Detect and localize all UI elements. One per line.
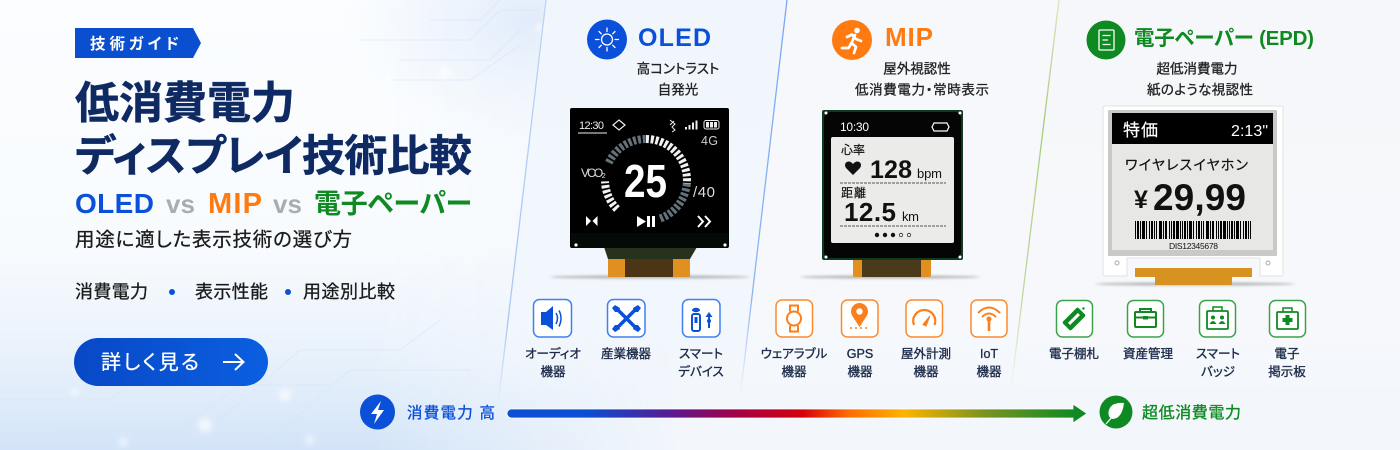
readouts: 距離 [841, 186, 866, 200]
gauge ring [605, 139, 687, 219]
description: MIP: 低消費電力・常時表示 [855, 82, 989, 98]
device: OLED display [550, 108, 750, 278]
label: e-signage [1268, 347, 1306, 379]
readouts: km [902, 209, 919, 224]
icon tile: wearable [776, 300, 812, 337]
media controls [586, 216, 710, 227]
icon tile: IoT [971, 300, 1007, 337]
status bar [840, 120, 949, 134]
description: EPD: 紙のような視認性 [1147, 82, 1253, 98]
description: EPD [1147, 62, 1253, 98]
label: e-signage: 掲示板 [1268, 364, 1306, 379]
device: OLED display: /40 [693, 184, 715, 201]
readouts: bpm [917, 166, 942, 181]
device: EPD display [1095, 106, 1295, 286]
label: wearable: ウェアラブル [761, 346, 827, 361]
price tag content: DIS12345678 [1169, 241, 1218, 251]
comparison heading: MIP [208, 188, 262, 220]
label: wearable: 機器 [781, 365, 807, 379]
gauge value: 25 [624, 155, 667, 207]
icon: EPD document [1086, 20, 1126, 60]
label: e-signage: 電子 [1274, 347, 1300, 361]
icon: MIP runner [832, 20, 872, 60]
comparison heading: vs [166, 189, 195, 219]
label: audio: 機器 [540, 365, 566, 379]
heading: OLED: OLED [638, 24, 711, 52]
label: GPS [847, 347, 873, 379]
icon tile: GPS [842, 300, 878, 337]
icon tile: smart badge [1200, 300, 1236, 337]
icon tile: e-signage [1270, 300, 1306, 337]
label: IoT: IoT [980, 347, 998, 361]
panel: MIP [761, 20, 1007, 379]
label: outdoor measurement: 屋外計測 [901, 346, 951, 361]
icon tile: e-shelf label [1056, 300, 1092, 337]
label: outdoor measurement [901, 346, 951, 379]
label: high power: 消費電力 高 [407, 404, 495, 422]
status bar: 12:30 [579, 120, 604, 132]
price tag header [1123, 121, 1268, 140]
label: industrial: 産業機器 [601, 346, 651, 361]
arrow: power gradient [507, 404, 1087, 423]
badge: guide tag [75, 28, 201, 58]
comparison heading: vs [273, 189, 302, 219]
readouts: 128 [870, 156, 912, 184]
label: e-shelf label: 電子棚札 [1049, 346, 1099, 361]
label: smart badge: バッジ [1201, 365, 1235, 379]
description: MIP: 屋外視認性 [883, 62, 951, 76]
price tag header: 特価 [1123, 121, 1158, 140]
comparison heading: OLED [75, 188, 154, 219]
comparison heading: 電子ペーパー [314, 189, 472, 219]
label: GPS: 機器 [847, 365, 873, 379]
label: smart badge [1196, 347, 1240, 379]
label: IoT [976, 347, 1002, 379]
device: MIP display [800, 110, 980, 278]
button: details: 詳しく見る [101, 351, 199, 374]
label: audio [525, 346, 581, 379]
device: OLED display: VCO₂ [581, 166, 606, 180]
price tag header: 2:13" [1231, 123, 1268, 140]
label: IoT: 機器 [976, 365, 1002, 379]
title [75, 79, 472, 181]
power scale [360, 394, 1241, 430]
comparison heading [75, 188, 472, 220]
heading: MIP: MIP [885, 22, 933, 52]
label: smart device: スマート [679, 347, 723, 361]
background [0, 0, 1060, 450]
subtitle: 用途に適した表示技術の選び方 [75, 229, 352, 251]
feature list: 用途別比較 [303, 282, 395, 302]
icon tile: industrial [608, 300, 645, 337]
feature list [75, 282, 395, 302]
status bar: 4G [701, 134, 718, 148]
description: OLED: 自発光 [658, 82, 698, 98]
status bar: 10:30 [840, 120, 869, 134]
readouts: 12.5 [844, 197, 896, 227]
label: wearable [761, 346, 827, 379]
panel: EPD [1049, 20, 1314, 379]
price tag content: ワイヤレスイヤホン [1125, 157, 1248, 173]
icon tile: outdoor measurement [906, 300, 942, 337]
screen [831, 137, 954, 243]
label: smart badge: スマート [1196, 347, 1240, 361]
icon tile: smart device [682, 300, 720, 337]
readouts: 心率 [841, 143, 865, 157]
label: smart device: デバイス [678, 364, 724, 379]
icon tile: audio [534, 300, 572, 337]
description: MIP [855, 62, 989, 98]
icon tile: asset management [1128, 300, 1164, 337]
heading: EPD: 電子ペーパー (EPD) [1134, 27, 1314, 50]
label: audio: オーディオ [525, 346, 581, 361]
description: EPD: 超低消費電力 [1156, 62, 1238, 76]
label: outdoor measurement: 機器 [913, 365, 939, 379]
badge: guide tag: 技術ガイド [90, 34, 179, 53]
panel: OLED [525, 20, 750, 379]
description: OLED [637, 60, 719, 98]
label: asset management: 資産管理 [1123, 346, 1173, 361]
icon: high power bolt [360, 394, 395, 430]
label: GPS: GPS [847, 347, 873, 361]
title: 低消費電力 [75, 79, 295, 128]
description: OLED: 高コントラスト [637, 60, 719, 76]
readouts [840, 143, 946, 237]
icon: ultra low power leaf [1100, 396, 1132, 428]
price tag content: ¥ [1134, 186, 1148, 214]
price tag content: 29,99 [1153, 177, 1246, 218]
title: ディスプレイ技術比較 [75, 132, 472, 181]
icon: OLED sun [587, 20, 627, 60]
status bar [578, 120, 719, 148]
price tag content [1125, 157, 1253, 251]
label: smart device [678, 347, 724, 379]
feature list: 消費電力 [75, 282, 148, 302]
feature list: 表示性能 [195, 282, 268, 302]
button: details [74, 338, 268, 386]
label: ultra low power: 超低消費電力 [1142, 404, 1241, 422]
